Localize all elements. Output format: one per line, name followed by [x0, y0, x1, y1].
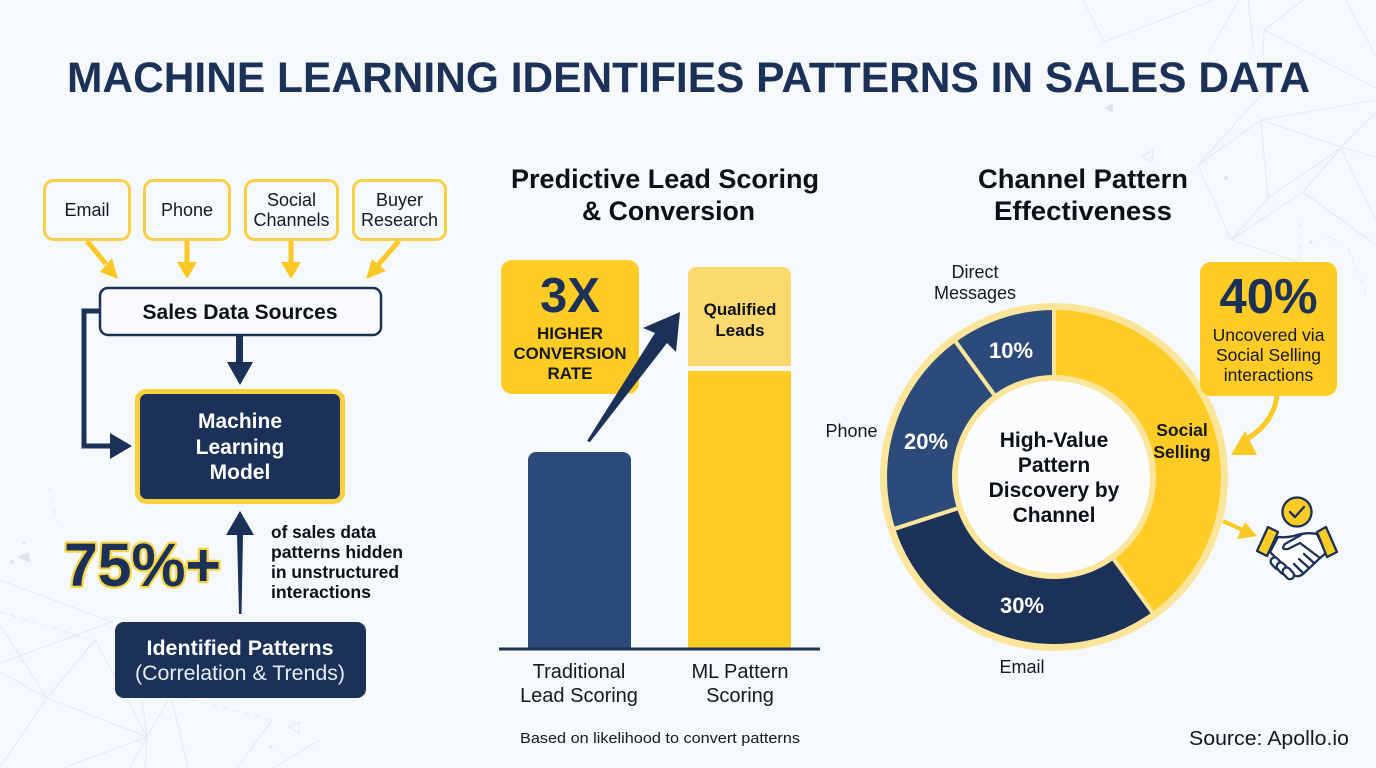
donut center label: High-Value — [1000, 429, 1108, 452]
callout: 3x: 3X — [540, 269, 600, 323]
heading: lead scoring: & Conversion — [582, 196, 755, 226]
segment values: 30% — [1000, 593, 1044, 618]
arrow: growth — [587, 312, 680, 442]
arrow: patterns to model — [226, 511, 254, 614]
stat: 75%+: 75%+ — [64, 531, 221, 599]
callout: 3x: HIGHER — [537, 324, 603, 343]
segment label: social selling — [1153, 420, 1211, 462]
stat description: of sales data — [271, 522, 376, 542]
machine learning model box — [138, 392, 342, 502]
source box: email: Email — [64, 200, 110, 220]
donut center label: Discovery by — [989, 479, 1120, 502]
heading: channel: Effectiveness — [994, 196, 1172, 226]
stat description: patterns hidden — [271, 542, 403, 562]
source box: phone: Phone — [161, 200, 213, 220]
arrows: sources to sales data — [87, 241, 399, 279]
machine learning model box: Model — [210, 461, 270, 484]
callout: 40%: Uncovered via — [1213, 325, 1325, 345]
icon: handshake with check — [1257, 498, 1337, 581]
heading: lead scoring — [511, 164, 819, 226]
sales data sources box: Sales Data Sources — [142, 301, 338, 324]
callout: 40%: 40% — [1219, 270, 1318, 324]
panel: channel effectiveness — [825, 164, 1337, 677]
axis label: traditional: Traditional — [533, 661, 625, 683]
label: direct messages: Messages — [934, 283, 1016, 303]
axis label: ml pattern: ML Pattern — [691, 661, 789, 683]
source credit: Source: Apollo.io — [1189, 728, 1349, 750]
source box: social channels: Channels — [253, 210, 330, 230]
stat description: in unstructured — [271, 562, 399, 582]
source box: social channels — [246, 180, 338, 240]
axis label: traditional — [520, 661, 638, 707]
callout: 3x: RATE — [547, 364, 593, 383]
bar: traditional — [528, 452, 631, 648]
bar: ml pattern scoring: Qualified — [704, 300, 776, 319]
chart baseline — [499, 648, 820, 650]
source box: phone — [144, 180, 230, 240]
source box: social channels: Social — [267, 190, 316, 210]
donut center label: Pattern — [1018, 454, 1090, 477]
panel: lead scoring — [499, 164, 820, 747]
bar: ml pattern scoring: Leads — [715, 321, 765, 340]
footnote: Based on likelihood to convert patterns — [520, 730, 800, 747]
donut chart — [880, 303, 1228, 651]
callout: 3x: CONVERSION — [514, 344, 626, 363]
heading: channel — [978, 164, 1188, 226]
sales data sources box — [100, 288, 381, 335]
identified patterns box: (Correlation & Trends) — [135, 662, 345, 685]
segment values — [904, 338, 1044, 618]
label: email: Email — [999, 657, 1045, 677]
callout: 40%: interactions — [1224, 365, 1313, 385]
title: MACHINE LEARNING IDENTIFIES PATTERNS IN SALES DATA — [67, 54, 1310, 102]
arrow: elbow to model — [84, 311, 132, 459]
axis label: ml pattern: Scoring — [706, 685, 774, 707]
stat description — [271, 522, 403, 602]
source box: buyer research: Research — [361, 210, 438, 230]
heading: lead scoring: Predictive Lead Scoring — [511, 164, 819, 194]
label: phone: Phone — [825, 421, 878, 441]
identified patterns box — [115, 622, 366, 698]
label: direct messages — [934, 262, 1016, 303]
donut center label: Channel — [1013, 504, 1095, 527]
axis label: ml pattern — [691, 661, 789, 707]
arrow: callout to donut — [1231, 396, 1277, 455]
callout: 40% — [1200, 262, 1337, 396]
label: direct messages: Direct — [951, 262, 999, 282]
callout: 40%: Social Selling — [1216, 345, 1321, 365]
segment label: social selling: Social — [1156, 420, 1208, 440]
arrow: sales data to model — [227, 335, 253, 385]
source box: buyer research: Buyer — [376, 190, 423, 210]
machine learning model box: Machine — [198, 410, 282, 433]
panel: data flow — [44, 180, 446, 698]
machine learning model box: Learning — [196, 436, 284, 459]
donut center label — [989, 429, 1120, 527]
axis label: traditional: Lead Scoring — [520, 685, 638, 707]
segment values: 10% — [989, 338, 1033, 363]
heading: channel: Channel Pattern — [978, 164, 1188, 194]
segment label: social selling: Selling — [1153, 442, 1211, 462]
segment values: 20% — [904, 429, 948, 454]
callout: 3x — [501, 260, 639, 394]
bar: ml pattern scoring — [688, 267, 791, 648]
arrow: donut to handshake — [1223, 521, 1257, 539]
stat description: interactions — [271, 582, 371, 602]
source box: email — [44, 180, 130, 240]
source box: buyer research — [354, 180, 446, 240]
identified patterns box: Identified Patterns — [146, 637, 334, 660]
